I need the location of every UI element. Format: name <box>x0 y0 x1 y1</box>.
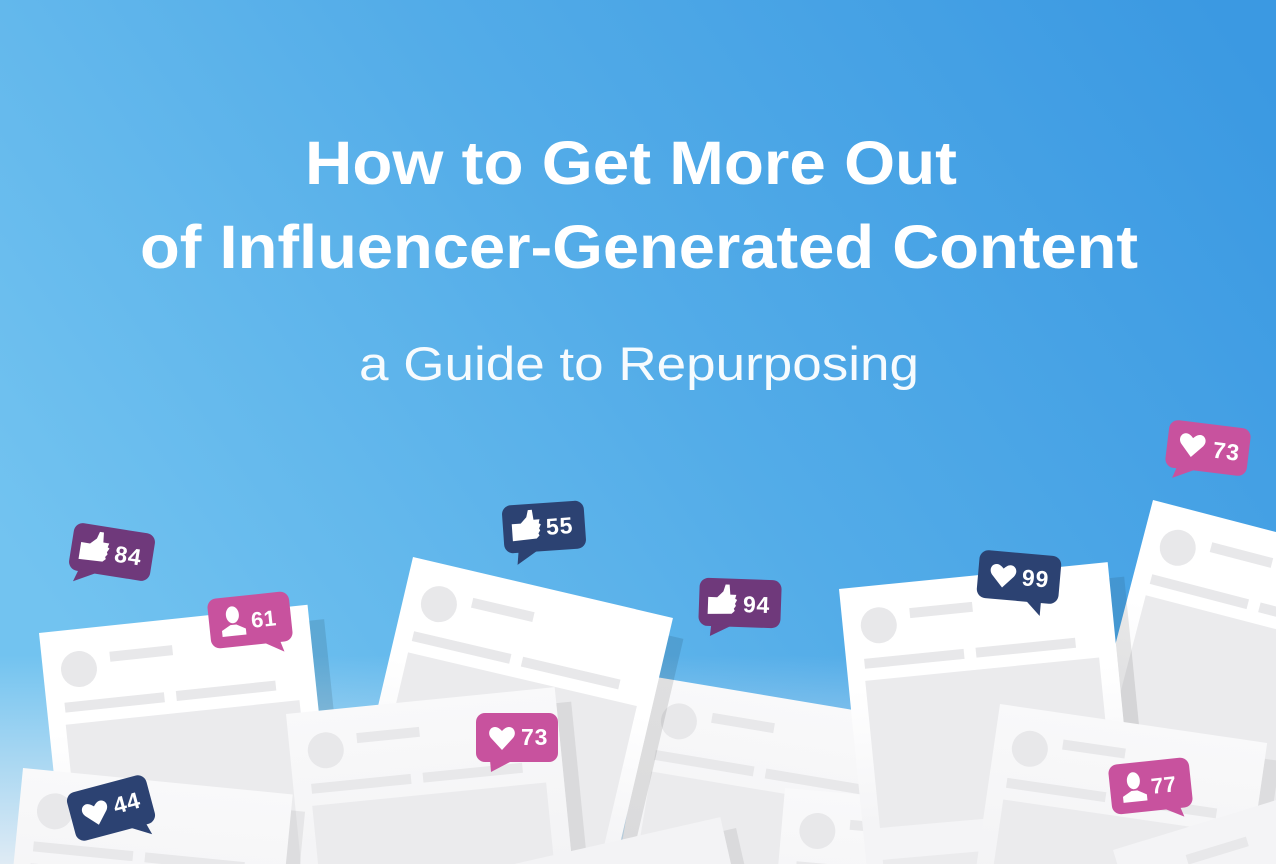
badge: followers 61: 61 <box>250 605 278 633</box>
badge: hearts 73 top right: 73 <box>1211 437 1241 466</box>
card: mid front <box>286 686 603 864</box>
badge: hearts 99 <box>975 550 1062 617</box>
subtitle: a Guide to Repurposing <box>359 337 919 390</box>
card: left back <box>39 603 358 864</box>
card: far right <box>1067 500 1276 864</box>
badge: hearts 73 center <box>476 713 558 772</box>
badge: likes 84 <box>66 522 156 593</box>
card: right back <box>839 561 1157 864</box>
badge: followers 61 <box>207 591 294 659</box>
card: lower strip <box>868 812 1074 864</box>
badge: followers 77: 77 <box>1150 771 1178 799</box>
badge: hearts 44: 44 <box>110 787 143 819</box>
badge: hearts 73 center: 73 <box>521 724 548 750</box>
badge: likes 55: 55 <box>545 512 574 540</box>
badge: hearts 44 <box>65 773 160 853</box>
title: of Influencer-Generated Content <box>140 213 1138 281</box>
title: How to Get More Out <box>305 129 957 197</box>
card: center lower <box>756 788 1054 864</box>
bottom fade <box>0 655 1276 864</box>
badge: likes 94 <box>698 578 782 638</box>
badge: hearts 99: 99 <box>1021 564 1050 593</box>
social post cards <box>0 500 1276 864</box>
badge: likes 94: 94 <box>743 591 771 618</box>
card: right front <box>951 704 1276 864</box>
card: center back <box>335 557 688 864</box>
badge: hearts 73 top right <box>1163 419 1252 487</box>
card: bottom center <box>457 814 760 864</box>
badge: likes 55 <box>501 500 587 566</box>
title <box>140 129 1138 281</box>
card: bottom right <box>1113 771 1276 864</box>
card: bottom left <box>0 768 307 864</box>
badge: followers 77 <box>1108 757 1194 824</box>
badge: likes 84: 84 <box>113 541 144 571</box>
card: center right <box>594 676 916 864</box>
